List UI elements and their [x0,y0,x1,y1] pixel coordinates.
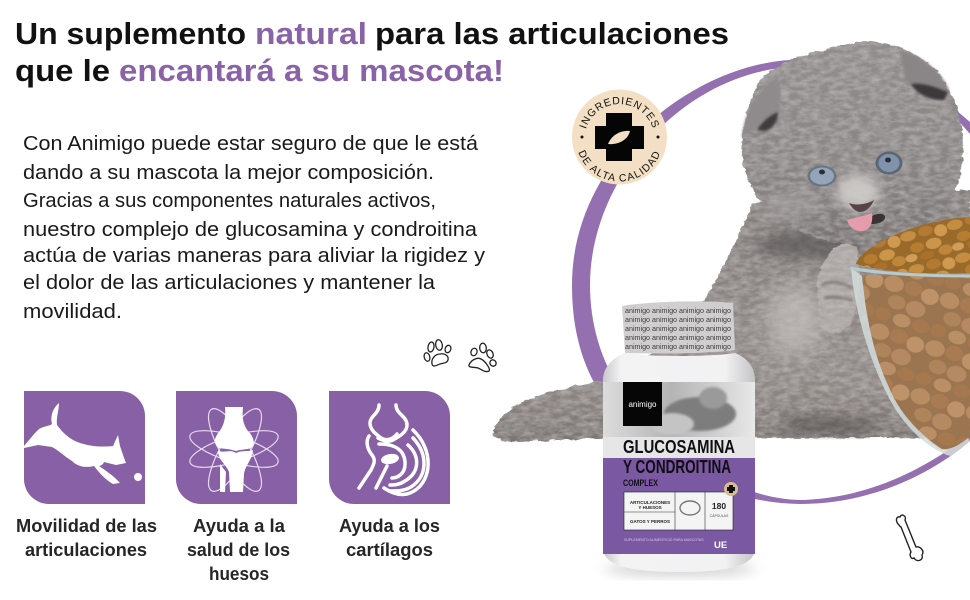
labels: huesos [209,564,269,584]
labels: articulaciones [25,540,147,560]
icon: knee joint with orbits [186,402,282,498]
body text: movilidad. [23,301,122,323]
glass rim [850,268,970,276]
labels: Movilidad de las [16,516,157,536]
icon: bone [896,515,923,561]
footer text on label [624,538,727,551]
kitten [492,42,970,442]
labels: Ayuda a los [339,516,440,536]
product name: GLUCOSAMINA [623,437,735,457]
body text: el dolor de las articulaciones y mantener la [23,272,436,294]
bottle body [603,353,755,572]
product bottle: animigo animigo animigo animigo [625,344,731,351]
product name: COMPLEX [623,478,658,489]
left eye [808,166,836,186]
kitten body [492,190,970,442]
title [15,16,729,88]
body shading [767,284,823,356]
body text: nuestro complejo de glucosamina y condroitina [23,219,478,241]
body text: Con Animigo puede estar seguro de que le está [23,133,479,155]
icon: cross with leaf [595,113,644,161]
kitten head [742,42,963,245]
product bottle [603,301,755,572]
icon: joint with cartilage arcs [359,405,428,494]
badge text: DE ALTA CALIDAD [578,150,659,182]
info box: Y HUESOS [638,505,662,510]
brand block [623,382,662,426]
footer text on label: UE [714,540,727,551]
labels: cartílagos [346,540,433,560]
product bottle: animigo animigo animigo animigo [625,308,731,315]
title: Un suplemento [15,16,246,51]
icon: running dog [24,403,126,484]
info box: CÁPSULAS [710,514,729,518]
purple ring [572,60,970,504]
info box: ARTICULACIONES [630,500,670,505]
mouth [871,214,885,224]
right ear [900,50,949,100]
title: que le [15,53,110,88]
food heap [856,217,970,273]
info box [624,482,738,530]
tongue [847,213,872,231]
bottle cap [622,301,735,354]
labels [16,516,440,584]
title: para las articulaciones [375,16,729,51]
product bottle: animigo animigo animigo animigo [625,326,731,333]
badge: quality ingredients [572,90,667,184]
title: natural [255,16,367,51]
title: encantará a su mascota! [119,53,504,88]
footer text on label: SUPLEMENTO ALIMENTICIO PARA MASCOTAS [624,538,704,542]
badge text [578,97,659,182]
icon: paw prints [423,339,497,372]
nose [849,200,874,212]
purple band [603,458,755,554]
body text: dando a su mascota la mejor composición. [23,162,434,184]
paw on bowl [817,244,860,333]
body text [23,133,485,323]
labels: salud de los [187,540,290,560]
icon: ball [134,473,142,481]
product bottle: animigo animigo animigo animigo [625,335,731,342]
tile: cartilage [329,391,450,504]
right eye [876,152,902,174]
bottle shadow [604,562,756,576]
tile: mobility [24,391,145,504]
product name [623,437,735,489]
food inside glass [861,275,970,450]
body text: Gracias a sus componentes naturales activos, [23,190,436,212]
info box: GATOS Y PERROS [630,519,670,524]
product bottle: animigo animigo animigo animigo [625,317,731,324]
labels: Ayuda a la [193,516,286,536]
body text: actúa de varias maneras para aliviar la rigidez y [23,245,485,267]
head highlights [836,174,880,210]
info box: 180 [712,501,726,511]
brand block: animigo [628,400,657,409]
tile: bones [176,391,297,504]
badge text: INGREDIENTES [579,97,659,128]
glass edge [851,268,970,456]
label photo band [603,382,755,458]
bowl of food [850,217,970,456]
product name: Y CONDROITINA [623,457,731,477]
left ear [742,76,780,137]
